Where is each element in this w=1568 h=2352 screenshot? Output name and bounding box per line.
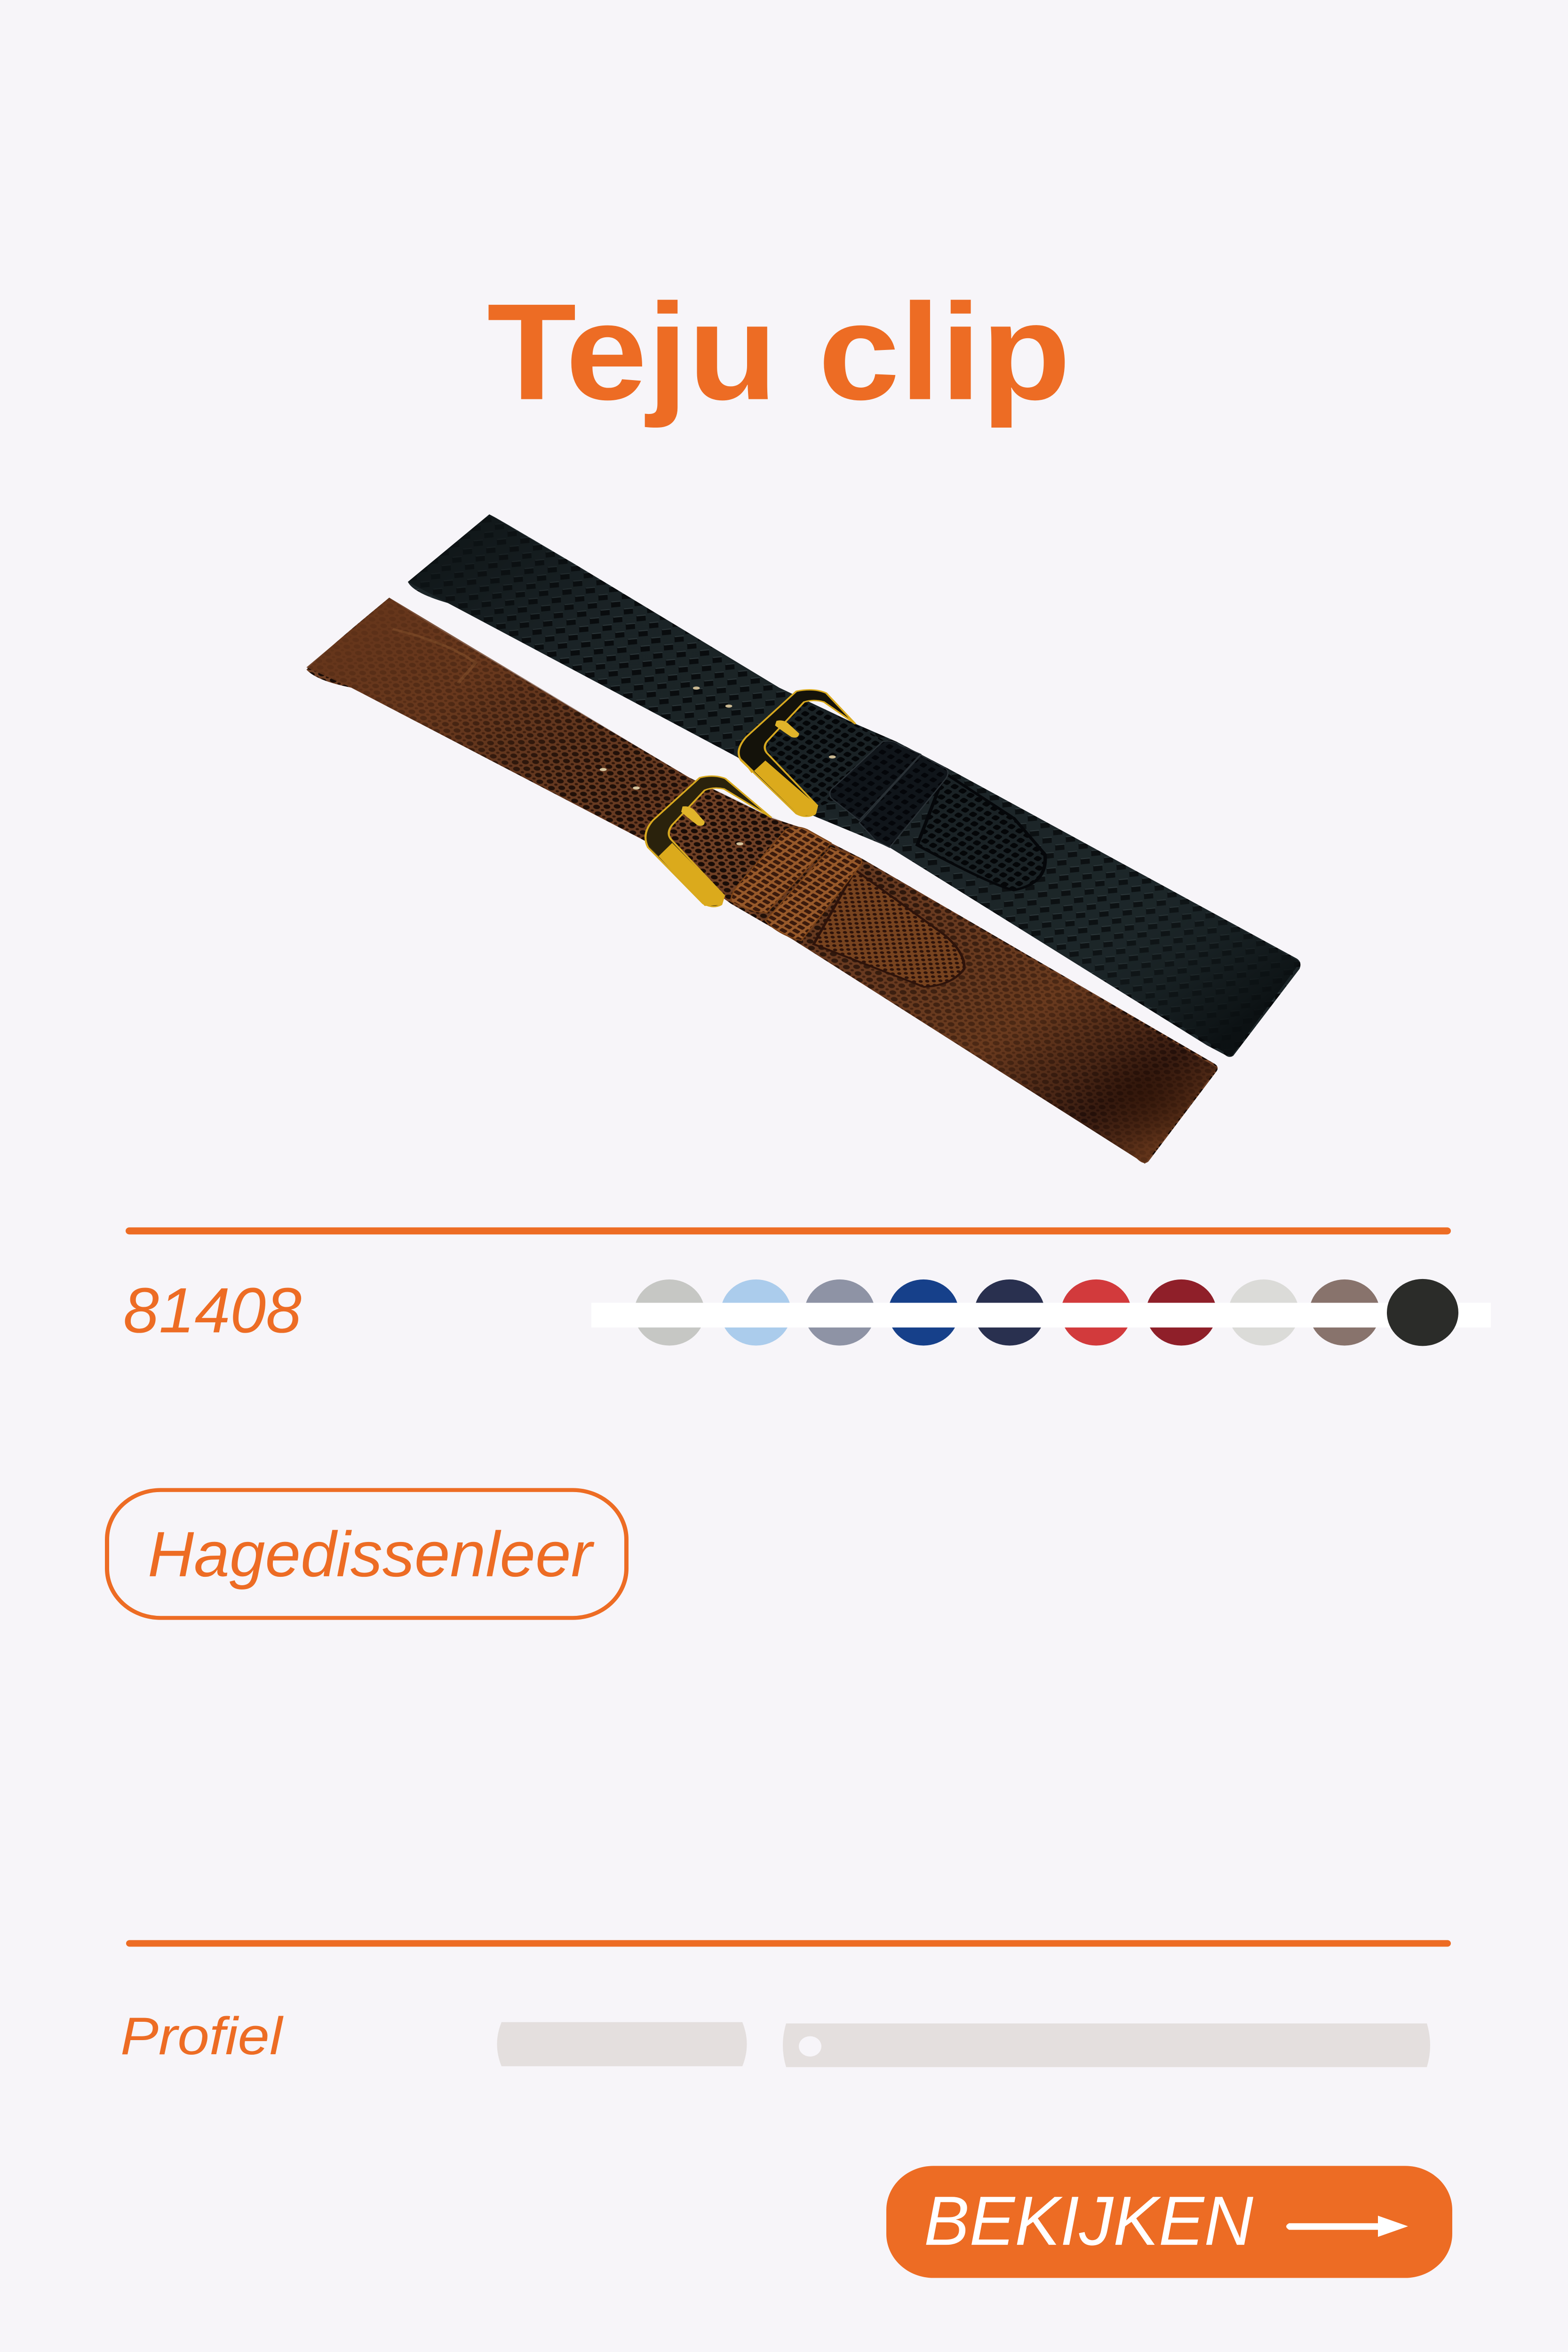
colour swatches (591, 1279, 1491, 1346)
brown buckle section (665, 787, 796, 895)
swatch: royal blue (888, 1279, 959, 1345)
arrow (1286, 2216, 1408, 2237)
swatch: slate grey (804, 1279, 875, 1345)
brown tail (814, 870, 964, 987)
black strap tail (917, 773, 1045, 890)
swatch: burgundy (1146, 1279, 1217, 1345)
swatch: silver grey (634, 1279, 705, 1345)
brown strap gold buckle (645, 776, 771, 906)
white swatch band (591, 1303, 1491, 1327)
swatch: taupe (1309, 1279, 1380, 1345)
swatch: red (1061, 1279, 1131, 1345)
black keepers (830, 741, 921, 820)
brown keepers (731, 827, 831, 913)
material tag: Hagedissenleer (148, 1518, 595, 1590)
product photo: two watch straps (306, 514, 1300, 1164)
swatch: navy (974, 1279, 1045, 1345)
swatch: light grey (1228, 1279, 1299, 1345)
profile label: Profiel (120, 2007, 284, 2066)
bottom divider line (126, 1940, 1451, 1947)
holes in black strap (693, 686, 836, 759)
swatch: light blue (721, 1279, 791, 1345)
swatch: black (1387, 1279, 1458, 1346)
material tag (107, 1490, 627, 1618)
black strap (408, 514, 1300, 1057)
brown strap (306, 597, 1218, 1164)
holes in brown strap (600, 768, 743, 845)
black strap gold buckle (739, 690, 855, 816)
button: bekijken: BEKIJKEN (924, 2182, 1253, 2260)
article number: 81408 (123, 1275, 302, 1346)
profile shape: strap end with hole (783, 2024, 1430, 2067)
title: Teju clip (487, 275, 1071, 429)
black strap buckle section (758, 697, 890, 809)
profile shape: buckle end (497, 2022, 747, 2066)
top divider line (126, 1227, 1451, 1234)
button: bekijken (886, 2166, 1452, 2278)
